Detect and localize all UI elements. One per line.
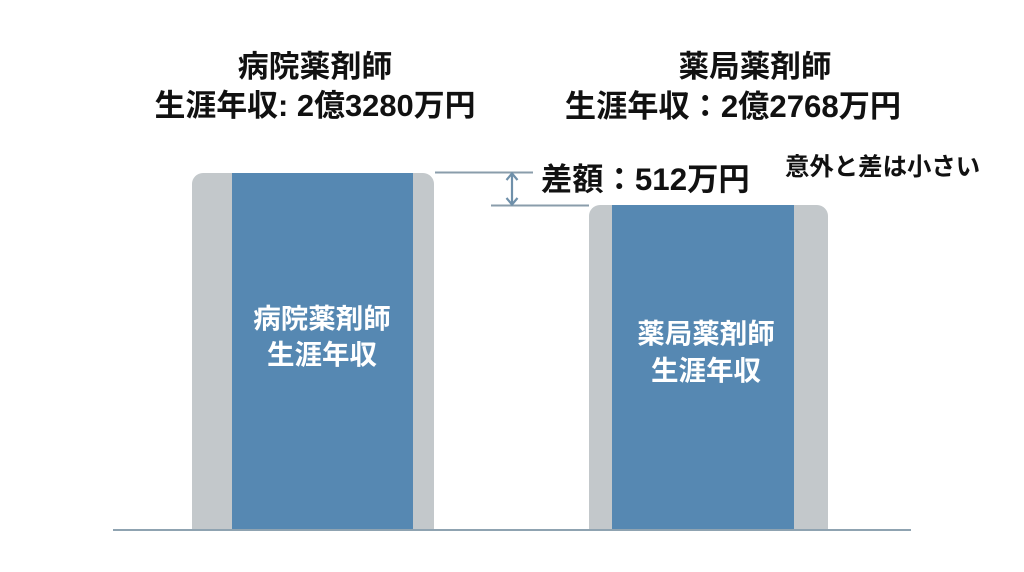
baseline axis (113, 529, 911, 531)
heading: hospital pharmacist lifetime income: 生涯年収: 2億3280万円 (154, 88, 476, 123)
bar core: pharmacy pharmacist income (612, 205, 794, 530)
heading: hospital pharmacist lifetime income (154, 49, 476, 123)
bar label: pharmacy pharmacist: 生涯年収 (651, 355, 761, 386)
heading: hospital pharmacist lifetime income: 病院薬剤師 (238, 49, 392, 84)
bar label: hospital pharmacist (253, 303, 391, 370)
bar core: hospital pharmacist income (232, 173, 413, 530)
difference label: 差額：512万円 (541, 162, 750, 197)
bar label: pharmacy pharmacist: 薬局薬剤師 (637, 318, 775, 349)
comment text: 意外と差は小さい (785, 154, 980, 181)
difference bracket arrow (435, 172, 589, 206)
bar: hospital pharmacist (192, 173, 434, 530)
bar: pharmacy pharmacist (589, 205, 828, 530)
bar label: hospital pharmacist: 病院薬剤師 (253, 303, 391, 334)
heading: pharmacy pharmacist lifetime income (565, 50, 901, 124)
bar label: pharmacy pharmacist (637, 318, 775, 386)
heading: pharmacy pharmacist lifetime income: 生涯年収：2億2768万円 (565, 89, 901, 124)
bar label: hospital pharmacist: 生涯年収 (267, 339, 377, 370)
heading: pharmacy pharmacist lifetime income: 薬局薬剤師 (679, 50, 831, 84)
